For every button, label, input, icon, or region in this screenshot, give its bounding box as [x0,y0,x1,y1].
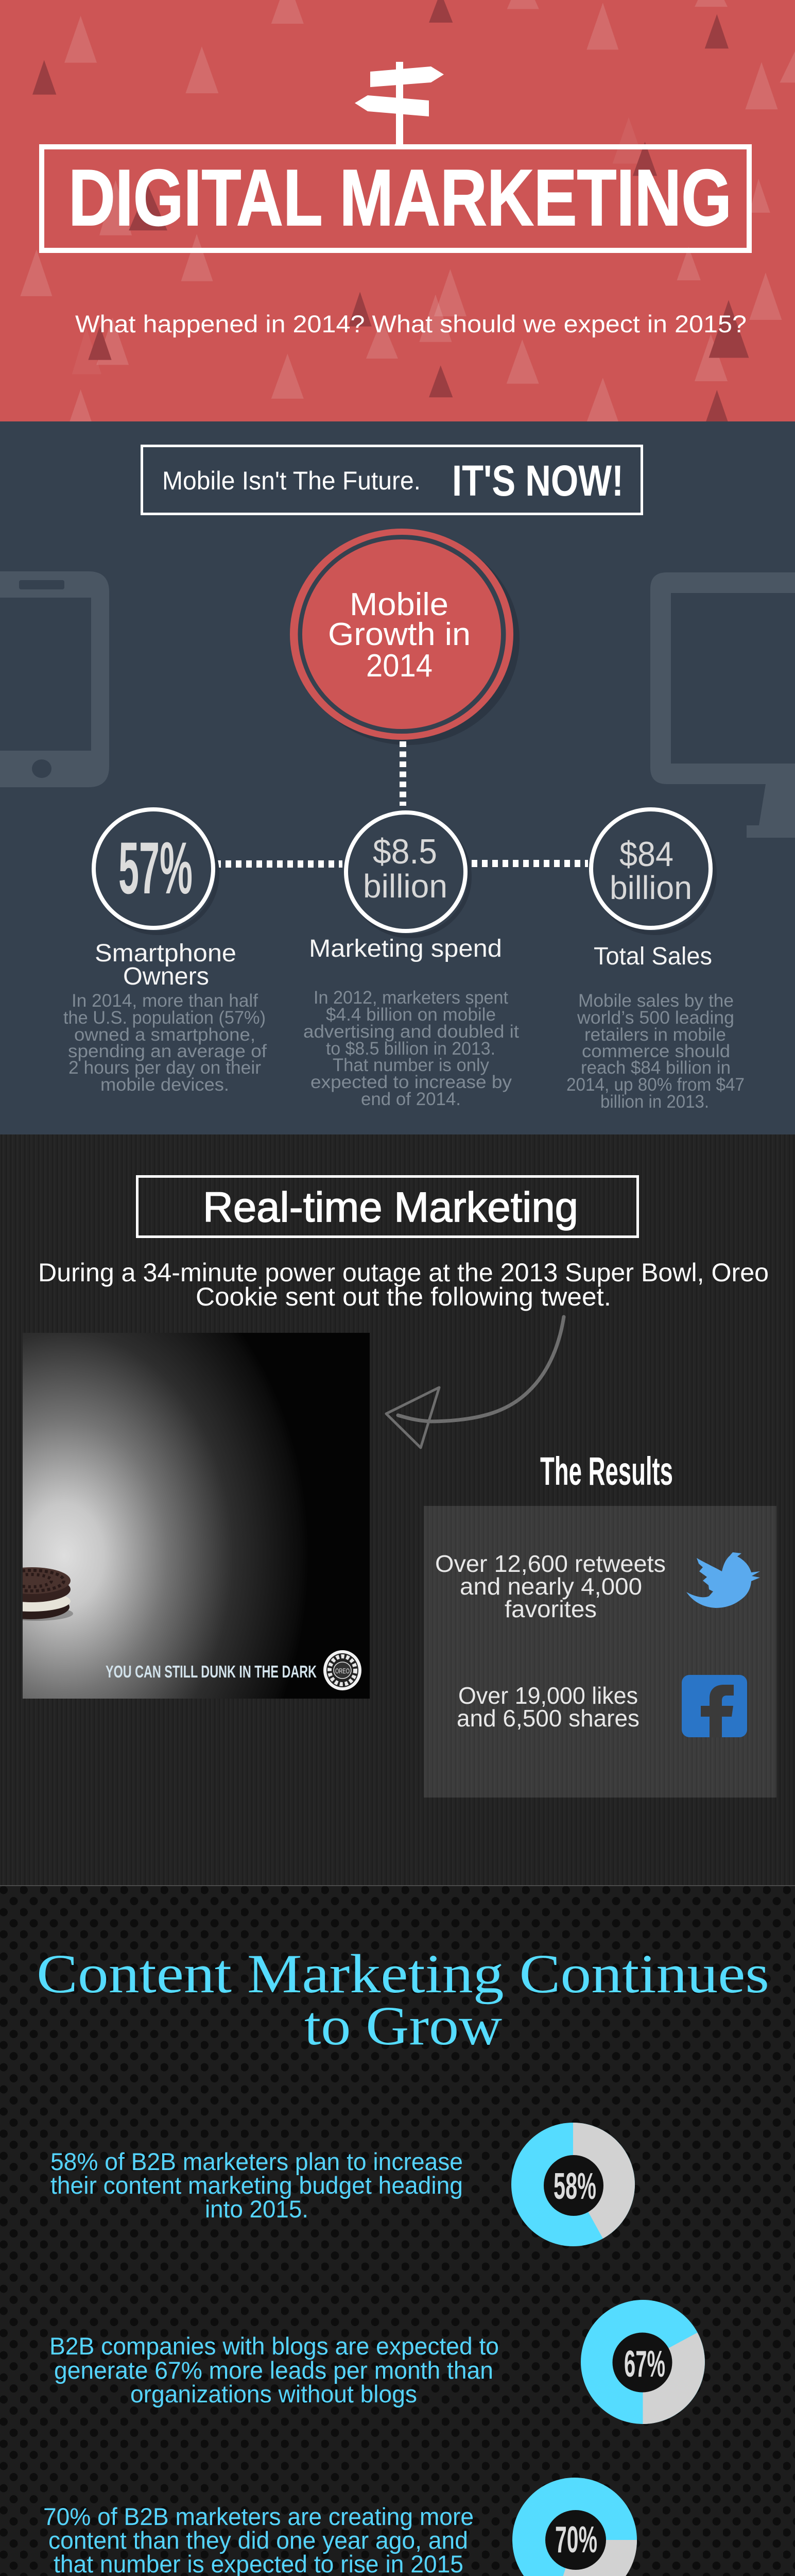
stat circle: 57% [94,809,217,933]
column: smartphone owners: mobile devices. [100,1075,229,1095]
icon: background monitor [650,572,795,838]
twitter stat: Over 12,600 retweets [435,1550,666,1577]
column: marketing spend [303,935,519,1109]
donut: 70%: 70% [555,2519,597,2561]
column: marketing spend: end of 2014. [361,1089,461,1109]
donut: 67% [581,2300,705,2424]
facebook stat: Over 19,000 likes [458,1682,638,1709]
stat text: 58%: their content marketing budget heading [50,2172,463,2199]
panel: content marketing [0,1885,795,2576]
panel: results [424,1506,776,1798]
heading: the results: The Results [540,1449,673,1494]
main circle: mobile growth in 2014 [290,529,520,745]
stat text: 70%: 70% of B2B marketers are creating more [43,2503,474,2530]
column: marketing spend: $4.4 billion on mobile [326,1005,496,1025]
stat text: 67%: generate 67% more leads per month than [54,2357,493,2384]
stat circle: $84 billion: $84 [619,835,673,874]
heading box [142,446,642,514]
connector: left dotted [215,860,342,868]
ad slogan: YOU CAN STILL DUNK IN THE DARK [106,1662,317,1681]
column: total sales: 2014, up 80% from $47 [566,1075,745,1095]
stat circle: $84 billion [591,809,715,933]
heading lead: Mobile Isn't The Future. [162,466,421,495]
column: total sales: billion in 2013. [600,1092,709,1112]
column: total sales: world’s 500 leading [577,1008,734,1028]
icon: oreo logo [323,1650,361,1690]
subtitle: What happened in 2014? What should we expect in 2015? [75,310,747,337]
column: marketing spend: to $8.5 billion in 2013. [326,1039,495,1059]
main circle: mobile growth in 2014: Mobile [350,587,448,622]
title box [42,147,749,250]
main circle: mobile growth in 2014: 2014 [366,648,433,684]
donut: 67%: 67% [624,2344,665,2385]
intro text: Cookie sent out the following tweet. [196,1282,611,1311]
column: smartphone owners [63,940,267,1095]
icon: oreo logo: OREO [335,1667,350,1675]
main circle: mobile growth in 2014: Growth in [328,617,471,652]
stat text: 70%: content than they did one year ago, and [48,2527,468,2554]
heading box: Real-time Marketing [203,1184,578,1231]
column: total sales: Total Sales [594,943,712,970]
column: total sales: Mobile sales by the [578,991,734,1011]
facebook stat [457,1682,640,1732]
oreo ad image [0,1333,370,1699]
stat circle: $8.5 billion: billion [363,868,447,905]
stat text: 58% [50,2148,463,2223]
donut: 58%: 58% [554,2166,596,2207]
column: smartphone owners: 2 hours per day on their [68,1058,261,1078]
panel: real-time marketing [0,1134,795,1886]
panel: header [0,0,795,422]
column: smartphone owners: In 2014, more than half [72,991,258,1011]
icon: facebook [682,1675,747,1737]
column: total sales: retailers in mobile [584,1025,726,1045]
heading [37,1944,769,2057]
column: marketing spend: That number is only [333,1055,489,1075]
column: marketing spend: In 2012, marketers spent [314,988,508,1008]
stat text: 67%: B2B companies with blogs are expected to [49,2332,499,2360]
arrow: hand-drawn to image [386,1317,564,1448]
column: total sales: commerce should [582,1041,730,1061]
heading: Content Marketing Continues [37,1944,769,2005]
icon: signpost [355,62,444,147]
stat circle: 57%: 57% [118,827,193,909]
stat text: 58%: into 2015. [205,2195,308,2223]
twitter stat [435,1550,666,1622]
twitter stat: favorites [505,1596,597,1622]
donut: 58% [511,2123,635,2246]
heading: to Grow [304,1996,502,2057]
donut: 70% [512,2478,637,2576]
connector: right dotted [472,860,588,867]
column: smartphone owners: owned a smartphone, [74,1025,255,1045]
intro text: During a 34-minute power outage at the 2013 Super Bowl, Oreo [38,1258,769,1287]
stat circle: $84 billion: billion [610,869,692,906]
icon: twitter bird [686,1552,760,1608]
column: marketing spend: advertising and doubled it [303,1022,519,1042]
column: smartphone owners: the U.S. population (57%) [63,1008,266,1028]
stat text: 70% [43,2503,474,2576]
stat circle: $8.5 billion: $8.5 [373,832,437,871]
column: smartphone owners: spending an average of [68,1041,267,1061]
column: total sales: reach $84 billion in [581,1058,731,1078]
stat text: 58%: 58% of B2B marketers plan to increase [50,2148,463,2175]
column: marketing spend: Marketing spend [309,935,502,962]
stat text: 67% [49,2332,499,2408]
icon: background phone [0,571,109,787]
column: total sales [566,943,745,1112]
stat circle: $8.5 billion [346,812,470,936]
twitter stat: and nearly 4,000 [460,1573,642,1600]
stat text: 67%: organizations without blogs [130,2380,417,2408]
icon: cookie [23,1567,73,1621]
column: marketing spend: expected to increase by [310,1072,512,1092]
column: smartphone owners: Smartphone [95,940,236,967]
column: smartphone owners: Owners [123,963,209,990]
heading box [137,1177,637,1236]
background triangles [20,0,795,422]
facebook stat: and 6,500 shares [457,1705,640,1732]
panel: mobile growth [0,421,795,1134]
connector: vertical dotted [400,741,406,806]
intro text [38,1258,769,1311]
heading emphasis: IT'S NOW! [452,456,624,505]
